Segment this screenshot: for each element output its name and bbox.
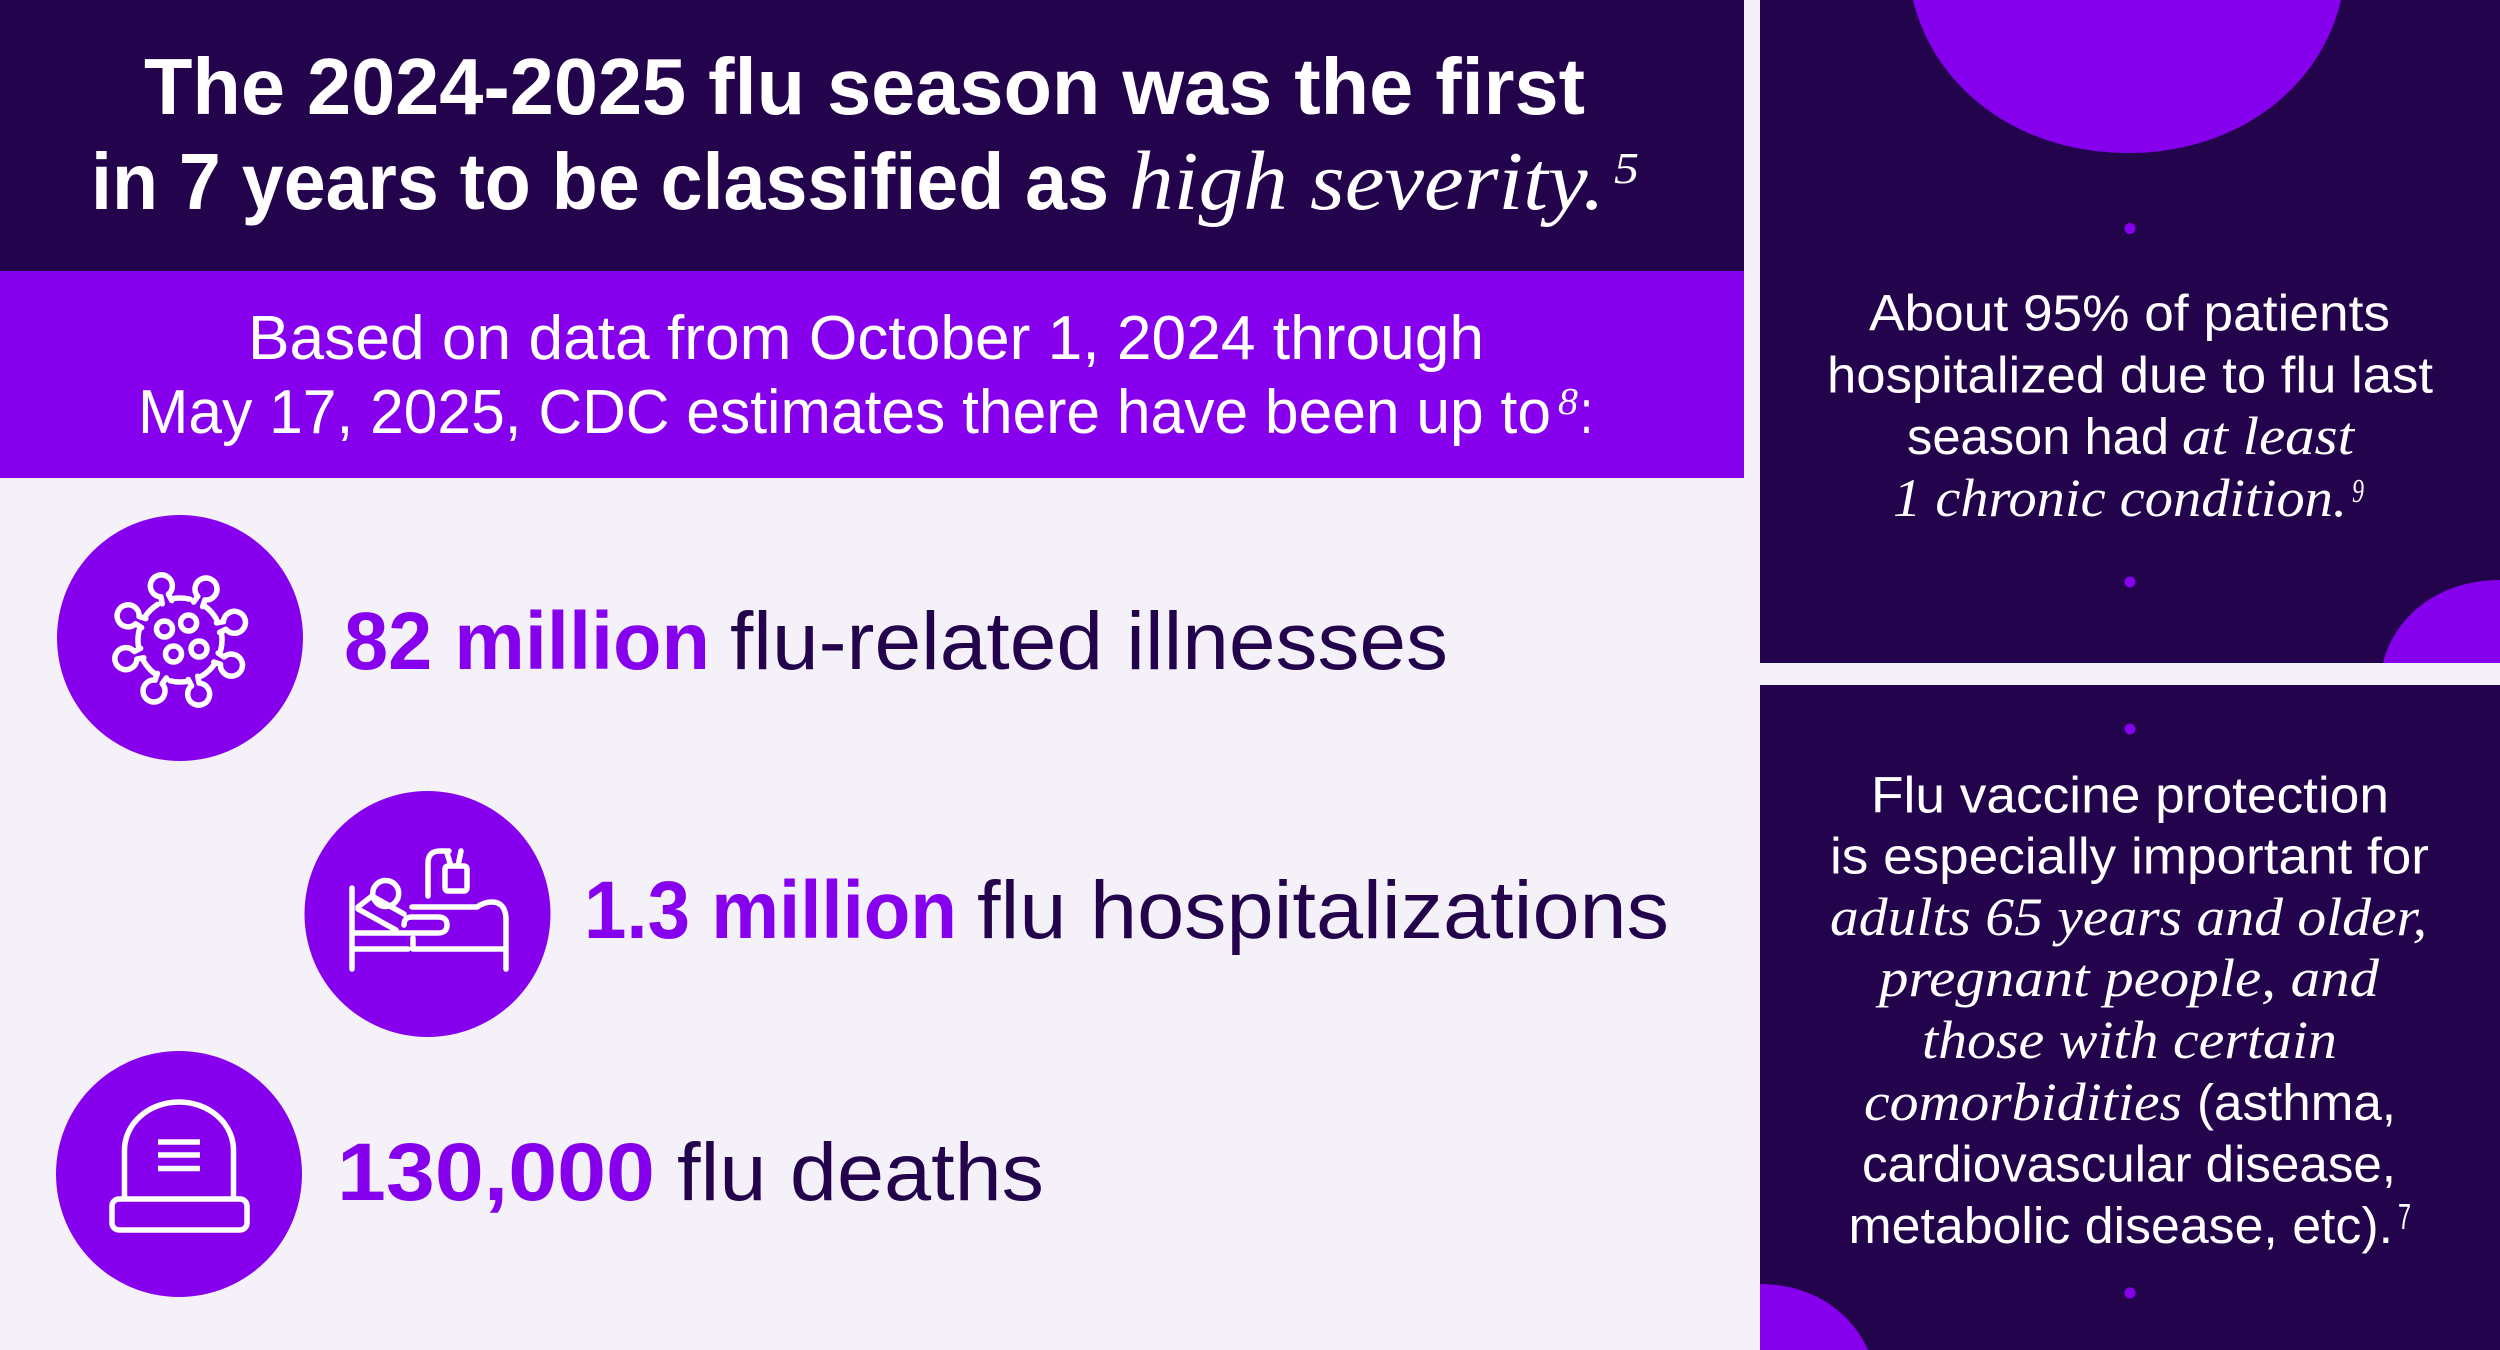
stat text: 130,000: 130,000 (337, 1127, 655, 1218)
panel: chronic conditions callout (1760, 0, 2500, 663)
callout text: Flu vaccine protection (1871, 766, 2389, 824)
stat text: 130,000: flu deaths (677, 1127, 1044, 1218)
panel: data source banner (0, 271, 1744, 478)
banner text: May 17, 2025, CDC estimates there have been up to (138, 378, 1551, 447)
dot: bottom (2124, 1288, 2136, 1298)
dot: top (2124, 223, 2136, 234)
decorative blob: top (1913, 0, 2341, 153)
decorative blob: bottom left (1760, 1284, 1868, 1350)
callout text: 1 chronic condition. (1893, 468, 2347, 528)
title: in 7 years to be classified as (91, 137, 1109, 226)
stat text: 1.3 million (584, 865, 1669, 956)
banner text (138, 304, 1593, 447)
title: high severity. (1129, 135, 1605, 228)
decorative blob: bottom right (2383, 580, 2500, 663)
callout text (1830, 766, 2429, 1254)
callout text: pregnant people, and (1875, 948, 2380, 1008)
banner text: 8 (1558, 381, 1578, 423)
callout text: hospitalized due to flu last (1827, 346, 2433, 404)
stat text: 130,000 (337, 1127, 1044, 1218)
stat text: 82 million (344, 596, 1448, 687)
callout text: comorbidities (1864, 1072, 2182, 1132)
banner text: : (1580, 378, 1593, 447)
callout text: those with certain (1922, 1010, 2337, 1070)
stat text: 82 million: 82 million (344, 596, 710, 687)
callout text: season had (1907, 408, 2169, 465)
title (91, 42, 1639, 228)
title: 5 (1614, 144, 1639, 193)
callout text: is especially important for (1830, 828, 2429, 884)
stat: hospitalizations (304, 791, 1669, 1037)
panel: headline (0, 0, 1744, 271)
dot: bottom (2124, 576, 2136, 588)
stat: illnesses (57, 515, 1448, 761)
callout text: cardiovascular disease, (1862, 1136, 2396, 1192)
title: The 2024-2025 flu season was the first (144, 42, 1585, 131)
callout text: 9 (2352, 473, 2364, 510)
callout text: About 95% of patients (1869, 284, 2390, 342)
banner text: Based on data from October 1, 2024 through (248, 304, 1484, 373)
icon: gravestone (56, 1051, 302, 1297)
stat: deaths (56, 1051, 1044, 1297)
callout text: (asthma, (2197, 1074, 2396, 1131)
stat text: 1.3 million: flu hospitalizations (977, 865, 1669, 956)
callout text: 7 (2398, 1196, 2411, 1237)
panel: vaccine protection callout (1760, 685, 2500, 1350)
callout text (1827, 284, 2433, 528)
stat text: 1.3 million: 1.3 million (584, 865, 957, 956)
stat text: 82 million: flu-related illnesses (730, 596, 1448, 687)
dot: top (2124, 724, 2136, 734)
callout text: adults 65 years and older, (1830, 887, 2427, 947)
icon: virus (57, 515, 303, 761)
callout text: metabolic disease, etc). (1848, 1197, 2393, 1254)
icon: hospital bed (304, 791, 550, 1037)
callout text: at least (2182, 406, 2356, 466)
